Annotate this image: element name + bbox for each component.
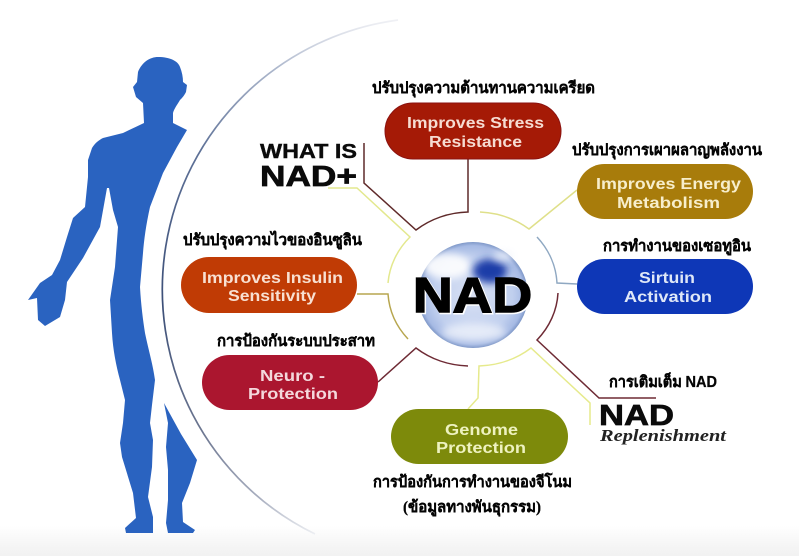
pill: genome protection: Protection — [436, 440, 526, 457]
heading: NAD replenishment — [599, 400, 728, 445]
heading: what is NAD+ — [260, 141, 357, 193]
heading: NAD replenishment: Replenishment — [599, 426, 728, 445]
heading: what is NAD+: WHAT IS — [260, 141, 357, 163]
background fade — [0, 526, 799, 556]
pill: improves stress resistance: Improves Stress — [407, 115, 544, 132]
thai label: sirtuin activation: การทำงานของเซอทูอิน — [603, 237, 751, 257]
thai label: energy metabolism: ปรับปรุงการเผาผลาญพลังงาน — [572, 142, 762, 160]
line: sirtuin activation — [537, 237, 577, 284]
heading: NAD replenishment: NAD — [599, 400, 674, 432]
thai label: NAD replenishment: การเติมเต็ม NAD — [609, 371, 717, 391]
line: neuro protection — [378, 348, 468, 382]
pill: sirtuin activation: Sirtuin — [639, 270, 695, 287]
large arc behind hub — [162, 20, 398, 534]
central NAD label: NAD — [413, 269, 532, 323]
line: what is NAD+ to stress resistance — [364, 143, 468, 230]
pill: improves stress resistance: Resistance — [429, 134, 522, 151]
pill: improves insulin sensitivity — [181, 257, 357, 313]
line: genome protection — [468, 348, 590, 425]
line: NAD replenishment maroon — [537, 293, 656, 398]
pill: improves energy metabolism — [577, 164, 753, 219]
thai label: insulin sensitivity: ปรับปรุงความไวของอินซูลิน — [183, 230, 362, 251]
pill: sirtuin activation: Activation — [624, 289, 712, 306]
central NAD label: NAD — [414, 270, 533, 324]
pill: improves energy metabolism: Improves Energy — [596, 176, 741, 193]
central sphere — [418, 242, 528, 348]
line: what is NAD+ yellow link — [328, 188, 410, 283]
human silhouette — [28, 57, 197, 533]
thai label: stress resistance: ปรับปรุงความต้านทานความเครียด — [372, 79, 595, 98]
thai label: genome protection: การป้องกันการทำงานของจีโนม — [373, 472, 572, 491]
pill: improves insulin sensitivity: Sensitivity — [228, 288, 316, 305]
thai label: neuro protection: การป้องกันระบบประสาท — [217, 332, 375, 350]
pill: sirtuin activation — [577, 259, 753, 314]
line: energy metabolism — [480, 190, 577, 229]
pill: genome protection: Genome — [445, 422, 518, 439]
pill: neuro protection: Protection — [248, 386, 338, 403]
pill: improves stress resistance — [385, 103, 561, 159]
thai label: genetic information: (ข้อมูลทางพันธุกรรม) — [403, 498, 541, 518]
pill: improves insulin sensitivity: Improves Insulin — [202, 270, 343, 287]
pill: neuro protection: Neuro - — [260, 368, 325, 385]
pill: genome protection — [391, 409, 568, 464]
connector lines — [328, 143, 656, 425]
heading: what is NAD+: NAD+ — [260, 161, 357, 193]
pill: improves energy metabolism: Metabolism — [617, 195, 720, 212]
pill: neuro protection — [202, 355, 378, 410]
line: insulin sensitivity — [357, 294, 408, 339]
